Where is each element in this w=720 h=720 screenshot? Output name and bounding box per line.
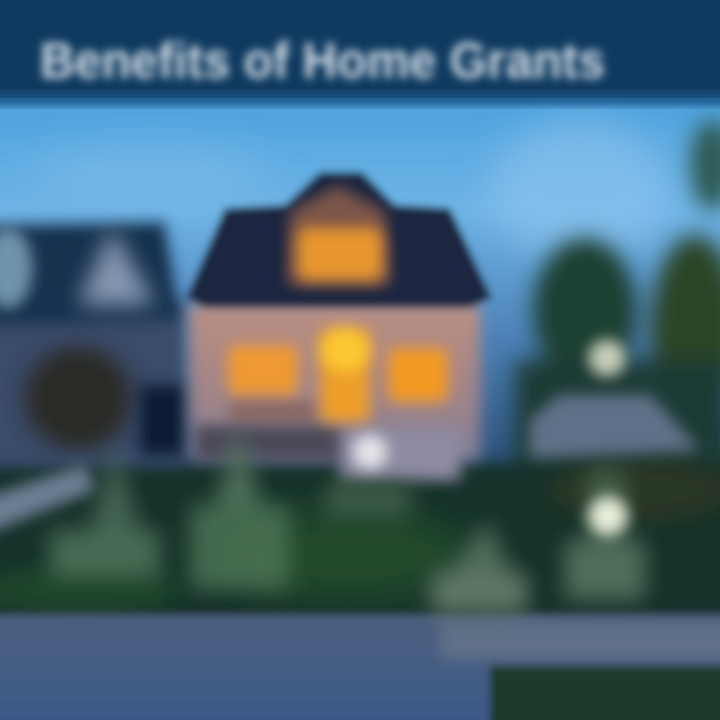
title: Benefits of Home Grants xyxy=(40,32,605,89)
dormer window xyxy=(298,228,382,280)
door glow xyxy=(320,330,370,422)
house porch base xyxy=(340,430,460,480)
left neighbouring house xyxy=(0,222,185,535)
dormer xyxy=(288,186,390,285)
road xyxy=(0,615,720,720)
trees on right xyxy=(515,119,720,490)
sky background xyxy=(0,90,720,490)
garden signs and lights xyxy=(50,340,645,614)
title banner xyxy=(0,0,720,105)
house wall xyxy=(190,305,480,460)
lower window shadow xyxy=(230,402,315,420)
right background house xyxy=(530,395,700,458)
main house xyxy=(186,172,492,480)
lawn xyxy=(0,460,720,627)
house roof xyxy=(186,172,492,308)
right window xyxy=(388,348,448,402)
left window xyxy=(228,345,298,395)
